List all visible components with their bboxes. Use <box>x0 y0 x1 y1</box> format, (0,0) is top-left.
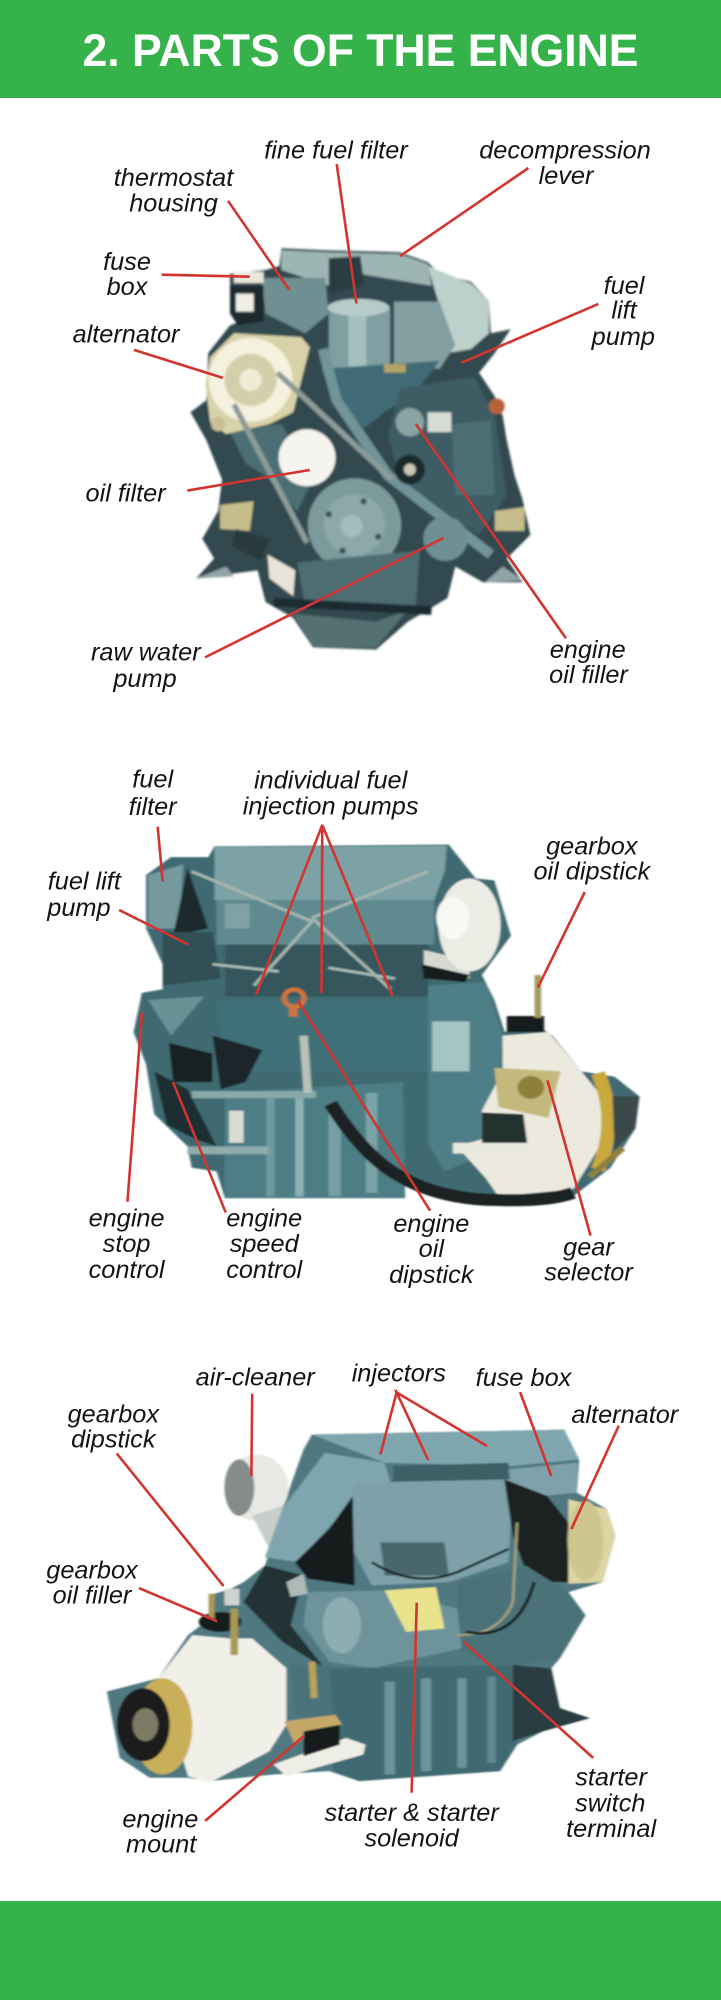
label: gearbox oil dipstick: gearbox <box>546 833 639 861</box>
leader: fuel filter <box>158 827 163 881</box>
label: fuse box: box <box>107 273 149 301</box>
leader: gearbox oil dipstick <box>538 892 585 987</box>
label: fuel lift pump: lift <box>611 297 638 325</box>
label: engine mount: engine <box>122 1806 198 1834</box>
label: fuel lift pump: pump <box>46 894 111 922</box>
leader: engine speed control <box>173 1082 226 1212</box>
label: individual fuel injection pumps: injection pumps <box>243 792 419 820</box>
leader: fuel lift pump <box>119 910 188 945</box>
title: 2. PARTS OF THE ENGINE <box>82 25 638 76</box>
leader lines: front view <box>134 164 598 657</box>
label: engine mount: mount <box>126 1830 197 1858</box>
label: engine speed control: engine <box>226 1205 302 1233</box>
label: engine speed control: speed <box>230 1230 300 1258</box>
leaders: injectors <box>380 1392 487 1460</box>
leader: thermostat housing <box>228 201 289 290</box>
label: injectors: injectors <box>352 1360 446 1388</box>
label: fuse box: fuse box <box>476 1364 573 1392</box>
photo: engine three-quarter view <box>107 1430 615 1783</box>
label: raw water pump: pump <box>112 665 177 693</box>
label: starter and starter solenoid: starter & starter <box>324 1799 500 1827</box>
panel: three-quarter view of engine <box>46 1360 680 1858</box>
label: fine fuel filter: fine fuel filter <box>264 136 409 164</box>
label: gearbox oil filler: gearbox <box>46 1556 139 1584</box>
leader: gearbox dipstick <box>117 1453 224 1586</box>
footer band <box>0 1901 721 2000</box>
leader: starter and starter solenoid <box>412 1603 417 1793</box>
leader: fuse box <box>520 1392 551 1476</box>
label: engine oil dipstick: oil <box>419 1235 445 1263</box>
label: starter and starter solenoid: solenoid <box>364 1824 460 1852</box>
label: air-cleaner: air-cleaner <box>196 1364 316 1392</box>
leader: fuel lift pump <box>461 304 598 363</box>
label: fuel filter: filter <box>129 793 178 821</box>
label: engine stop control: engine <box>89 1205 165 1233</box>
label: engine speed control: control <box>226 1256 304 1284</box>
leader: fine fuel filter <box>337 164 356 304</box>
leader: gear selector <box>547 1080 591 1236</box>
leader lines: three-quarter view <box>117 1392 619 1821</box>
leader: starter switch terminal <box>464 1642 593 1758</box>
panel: front view of engine <box>73 136 655 693</box>
panel: side view of engine <box>46 766 651 1289</box>
label: individual fuel injection pumps: individual fuel <box>254 767 409 795</box>
leader: raw water pump <box>205 538 443 657</box>
label: gearbox dipstick: gearbox <box>68 1400 160 1428</box>
label: gear selector: gear <box>563 1233 615 1261</box>
photo: engine side view <box>134 845 639 1204</box>
label: gear selector: selector <box>544 1258 634 1286</box>
label: starter switch terminal: terminal <box>566 1815 657 1843</box>
leaders: individual fuel injection pumps <box>256 825 393 996</box>
label: engine oil dipstick: dipstick <box>389 1261 475 1289</box>
leader: air-cleaner <box>250 1394 253 1476</box>
label: engine oil filler: oil filler <box>549 661 629 689</box>
label: decompression lever: lever <box>539 162 595 190</box>
leader: gearbox oil filler <box>139 1588 217 1621</box>
label: gearbox oil filler: oil filler <box>53 1582 133 1610</box>
label: fuel lift pump: pump <box>591 323 655 351</box>
leader: engine oil filler <box>416 424 566 638</box>
label: fuel filter: fuel <box>132 766 174 794</box>
label: raw water pump: raw water <box>91 639 202 667</box>
label: engine stop control: stop <box>103 1230 151 1258</box>
leader: alternator <box>134 350 223 378</box>
leader lines: side view <box>119 825 591 1236</box>
leader: engine oil dipstick <box>297 1000 430 1211</box>
leader: fuse box <box>162 275 250 277</box>
header band <box>0 0 721 98</box>
label: fuel lift pump: fuel <box>604 272 646 300</box>
label: fuel lift pump: fuel lift <box>48 867 122 895</box>
label: thermostat housing: thermostat <box>114 164 234 192</box>
label: thermostat housing: housing <box>129 190 218 218</box>
leader: alternator <box>571 1426 619 1529</box>
label: engine oil dipstick: engine <box>393 1210 469 1238</box>
leader: engine stop control <box>127 1012 142 1202</box>
label: engine stop control: control <box>89 1256 166 1284</box>
label: gearbox oil dipstick: oil dipstick <box>533 858 651 886</box>
label: gearbox dipstick: dipstick <box>71 1426 157 1454</box>
leader: engine mount <box>205 1736 303 1821</box>
label: alternator: alternator <box>73 321 181 349</box>
label: engine oil filler: engine <box>550 636 626 664</box>
leader: decompression lever <box>400 168 528 256</box>
label: starter switch terminal: starter <box>575 1764 649 1792</box>
label: starter switch terminal: switch <box>575 1790 645 1818</box>
label: oil filter: oil filter <box>86 480 167 508</box>
label: decompression lever: decompression <box>479 136 651 164</box>
photo: engine front view <box>190 248 530 649</box>
label: fuse box: fuse <box>103 248 151 276</box>
label: alternator: alternator <box>571 1401 680 1429</box>
leader: oil filter <box>187 470 310 491</box>
